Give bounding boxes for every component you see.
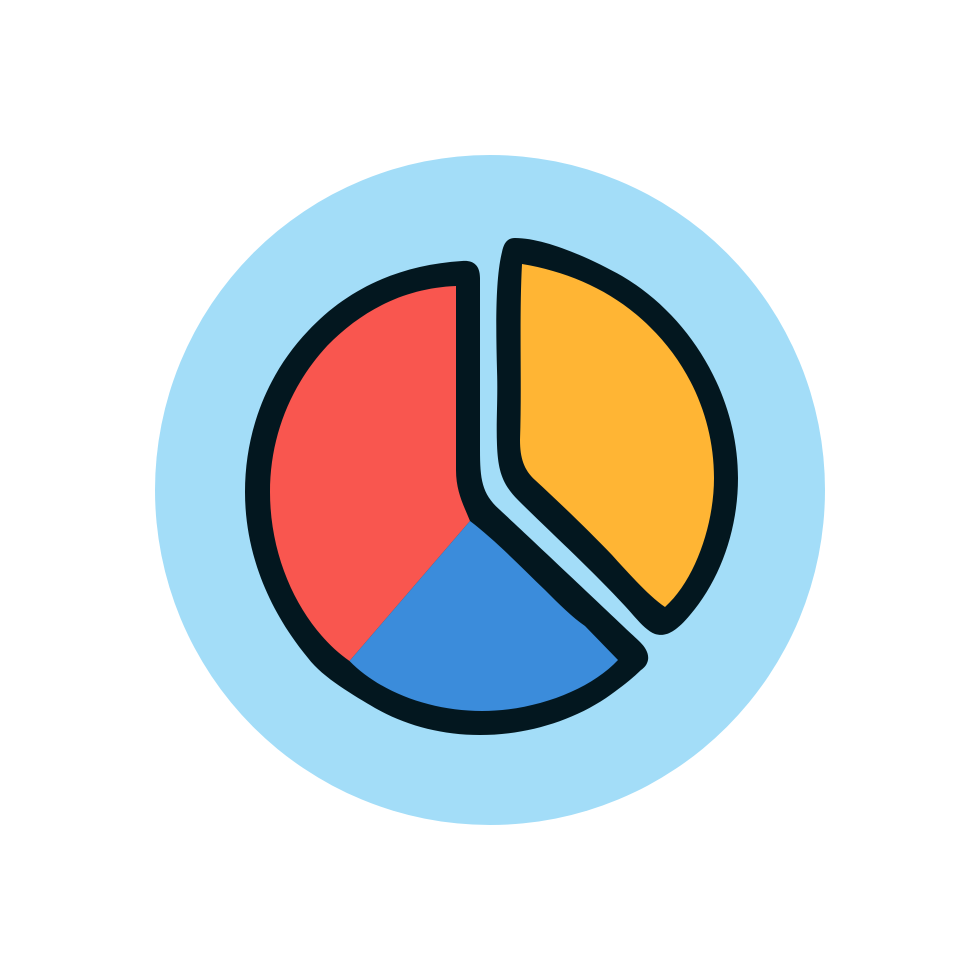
slice: yellow: [520, 264, 714, 607]
pie chart: [245, 238, 738, 735]
right slice outline: [496, 238, 738, 635]
left and bottom slices outline: [245, 261, 648, 735]
slice: red: [270, 286, 470, 661]
slice: blue: [350, 521, 618, 711]
background circle: [155, 155, 825, 825]
